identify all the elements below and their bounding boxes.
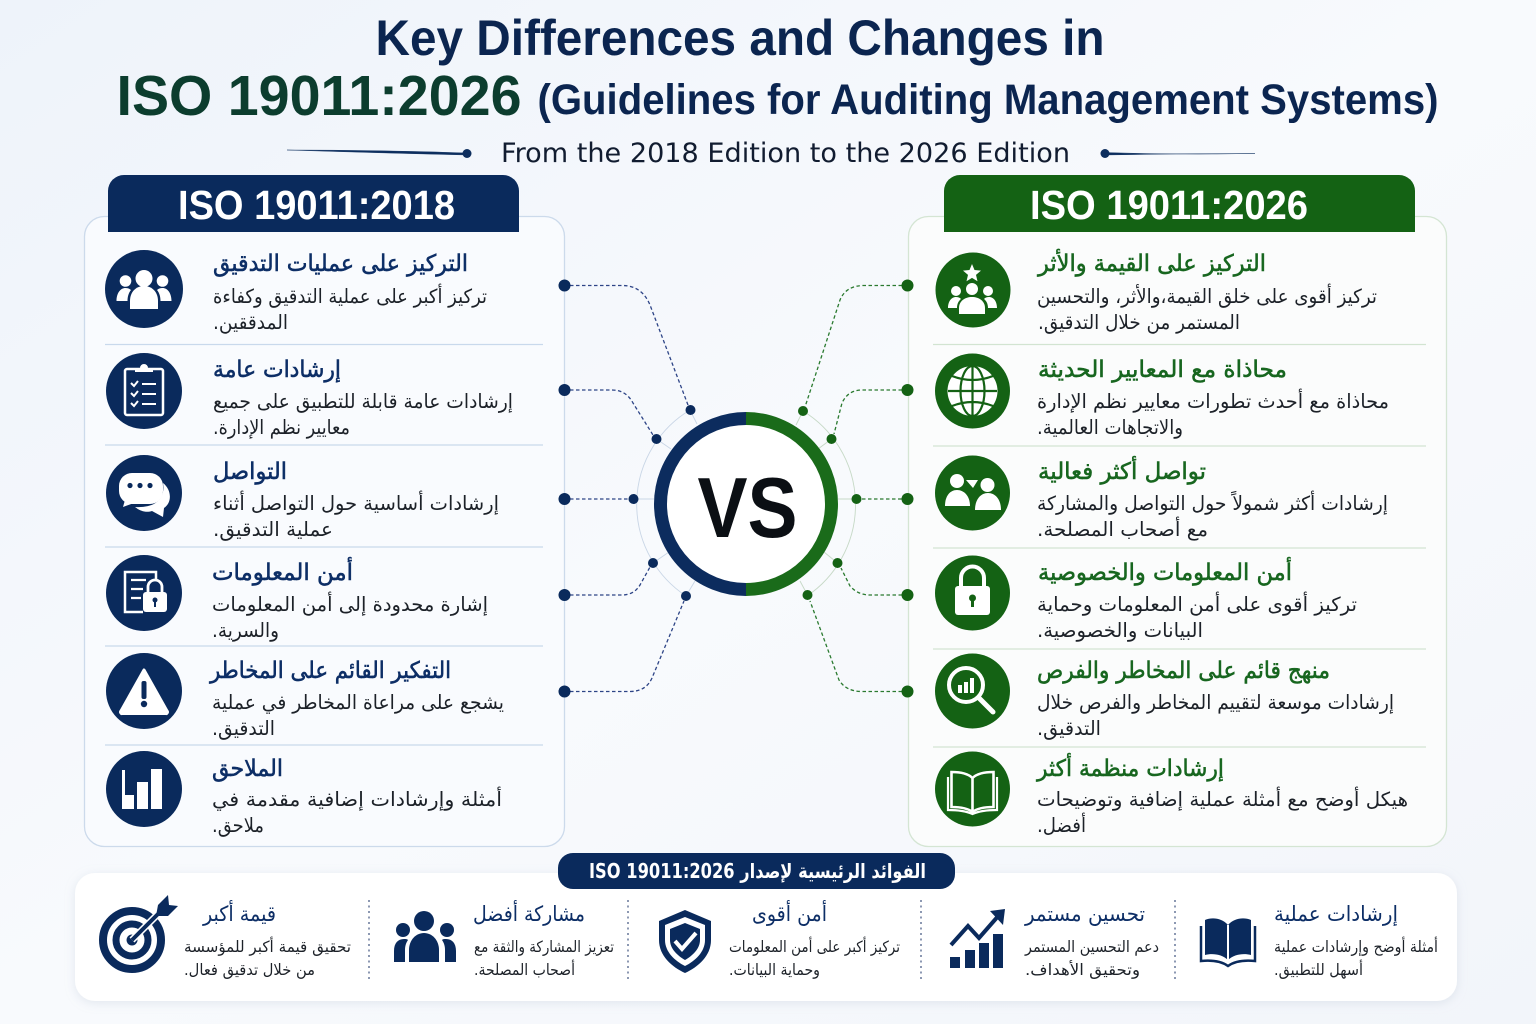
text: audit process focus: تركيز أكبر على عملية التدقيق وكفاءة: [213, 284, 487, 308]
text: value and impact: [1037, 249, 1377, 334]
text: practical guidance: [1274, 902, 1438, 980]
connectors: 2018 side: [558, 280, 697, 698]
text: risk-based thinking: التدقيق.: [212, 717, 275, 740]
text: information security: [212, 557, 488, 642]
text: better engagement: أصحاب المصلحة.: [474, 959, 575, 979]
connectors: 2026 side: [796, 280, 914, 698]
text: alignment with modern standards: [1037, 357, 1389, 439]
text: information security: أمن المعلومات: [212, 557, 353, 586]
text: more effective communication: [1037, 456, 1388, 541]
text: better structured guidance: هيكل أوضح مع أمثلة عملية إضافية وتوضيحات: [1037, 787, 1408, 812]
text: security and privacy: أمن المعلومات والخصوصية: [1038, 557, 1292, 586]
icon: rising chart: [950, 909, 1005, 968]
benefits heading pill: الفوائد الرئيسية لإصدار ISO 19011:2026: [589, 859, 926, 883]
icon: audit team: [105, 250, 183, 328]
VS badge: [660, 418, 832, 590]
text: greater value: من خلال تدقيق فعال.: [184, 961, 315, 979]
icon: people: [394, 911, 456, 962]
text: annexes: [212, 756, 502, 837]
panel: ISO 19011:2026: [908, 175, 1446, 846]
text: continual improvement: تحسين مستمر: [1024, 902, 1145, 926]
icon: clipboard checklist: [106, 353, 182, 429]
text: generic guidance: [213, 357, 513, 439]
subtitle: [287, 138, 1255, 169]
text: information security: إشارة محدودة إلى أمن المعلومات: [212, 592, 488, 617]
text: better engagement: تعزيز المشاركة والثقة مع: [474, 938, 614, 957]
icon: warning triangle: [106, 653, 182, 729]
icon: document lock: [106, 555, 182, 631]
text: alignment with modern standards: محاذاة مع أحدث تطورات معايير نظم الإدارة: [1037, 389, 1389, 413]
text: stronger security: [729, 900, 900, 980]
text: value and impact: التركيز على القيمة والأثر: [1037, 249, 1266, 277]
icon: bar chart: [106, 751, 182, 827]
text: annexes: ملاحق.: [212, 814, 264, 837]
text: generic guidance: إرشادات عامة قابلة للتطبيق على جميع: [213, 390, 513, 414]
text: greater value: قيمة أكبر: [202, 900, 276, 926]
icon: open book: [1201, 918, 1255, 966]
text: stronger security: أمن أقوى: [752, 900, 827, 926]
text: better structured guidance: أفضل.: [1037, 813, 1086, 837]
panel heading: 2026: [944, 175, 1415, 232]
text: risk and opportunity approach: إرشادات موسعة لتقييم المخاطر والفرص خلال: [1037, 691, 1394, 715]
text: greater value: تحقيق قيمة أكبر للمؤسسة: [184, 936, 351, 956]
panel: ISO 19011:2018: [84, 175, 564, 846]
text: generic guidance: معايير نظم الإدارة.: [213, 416, 350, 439]
icon: padlock: [935, 556, 1010, 630]
subtitle: From the 2018 Edition to the 2026 Edition: [501, 138, 1070, 169]
text: audit process focus: التركيز على عمليات التدقيق: [213, 251, 468, 277]
text: practical guidance: إرشادات عملية: [1274, 902, 1398, 927]
text: security and privacy: البيانات والخصوصية.: [1037, 619, 1203, 642]
text: risk-based thinking: يشجع على مراعاة المخاطر في عملية: [212, 691, 504, 714]
text: audit process focus: المدققين.: [213, 311, 288, 334]
icon: team with star: [936, 252, 1010, 328]
icon: globe: [935, 354, 1010, 428]
benefits heading pill: [558, 853, 955, 889]
text: better engagement: [473, 900, 614, 979]
text: risk and opportunity approach: [1037, 658, 1394, 740]
text: security and privacy: [1037, 557, 1357, 642]
icon: open book: [935, 752, 1010, 826]
text: audit process focus: [213, 251, 487, 334]
text: risk-based thinking: التفكير القائم على المخاطر: [209, 658, 451, 684]
text: communication: إرشادات أساسية حول التواصل أثناء: [213, 491, 499, 516]
text: more effective communication: مع أصحاب المصلحة.: [1037, 517, 1208, 541]
title: [116, 10, 1438, 128]
text: stronger security: وحماية البيانات.: [729, 961, 820, 980]
icon: magnifier with chart: [935, 654, 1010, 728]
text: practical guidance: أسهل للتطبيق.: [1274, 959, 1363, 980]
title line 2: guidelines: (Guidelines for Auditing Management Systems): [538, 76, 1438, 124]
text: more effective communication: تواصل أكثر فعالية: [1038, 456, 1206, 485]
text: risk-based thinking: [209, 658, 504, 740]
icon: shield with check: [659, 910, 711, 973]
icon: two people talking: [935, 456, 1010, 530]
text: continual improvement: وتحقيق الأهداف.: [1025, 960, 1140, 980]
text: alignment with modern standards: محاذاة مع المعايير الحديثة: [1038, 357, 1287, 383]
text: practical guidance: أمثلة أوضح وإرشادات عملية: [1274, 936, 1438, 957]
text: continual improvement: دعم التحسين المستمر: [1024, 938, 1159, 956]
text: better structured guidance: [1036, 753, 1408, 837]
text: risk and opportunity approach: منهج قائم على المخاطر والفرص: [1037, 658, 1330, 684]
text: information security: والسرية.: [212, 619, 279, 642]
VS badge: VS: [698, 461, 798, 556]
text: stronger security: تركيز أكبر على أمن المعلومات: [729, 936, 900, 956]
text: risk and opportunity approach: التدقيق.: [1037, 717, 1101, 740]
title line 2: standard name: ISO 19011:2026: [116, 64, 522, 128]
icon: target with arrow: [103, 895, 178, 969]
text: annexes: أمثلة وإرشادات إضافية مقدمة في: [212, 787, 502, 812]
text: security and privacy: تركيز أقوى على أمن المعلومات وحماية: [1037, 592, 1357, 616]
title line 1: Key Differences and Changes in: [376, 10, 1104, 66]
panel heading: 2018: ISO 19011:2018: [178, 182, 455, 228]
panel: key benefits: [75, 853, 1457, 1001]
text: annexes: الملاحق: [212, 756, 283, 782]
text: better engagement: مشاركة أفضل: [473, 900, 585, 926]
text: more effective communication: إرشادات أكثر شمولاً حول التواصل والمشاركة: [1037, 490, 1388, 516]
text: better structured guidance: إرشادات منظمة أكثر: [1036, 753, 1224, 782]
text: generic guidance: إرشادات عامة: [213, 357, 341, 383]
text: value and impact: تركيز أقوى على خلق القيمة،والأثر، والتحسين: [1037, 284, 1377, 308]
icon: chat bubbles: [106, 455, 182, 531]
text: greater value: [184, 900, 351, 979]
text: continual improvement: [1024, 902, 1159, 980]
panel heading: 2018: [108, 175, 519, 232]
text: alignment with modern standards: والاتجاهات العالمية.: [1037, 416, 1183, 439]
panel heading: 2026: ISO 19011:2026: [1030, 182, 1308, 228]
text: communication: [213, 459, 499, 541]
text: communication: التواصل: [213, 459, 287, 485]
text: communication: عملية التدقيق.: [213, 518, 333, 541]
text: value and impact: المستمر من خلال التدقيق.: [1038, 311, 1240, 334]
